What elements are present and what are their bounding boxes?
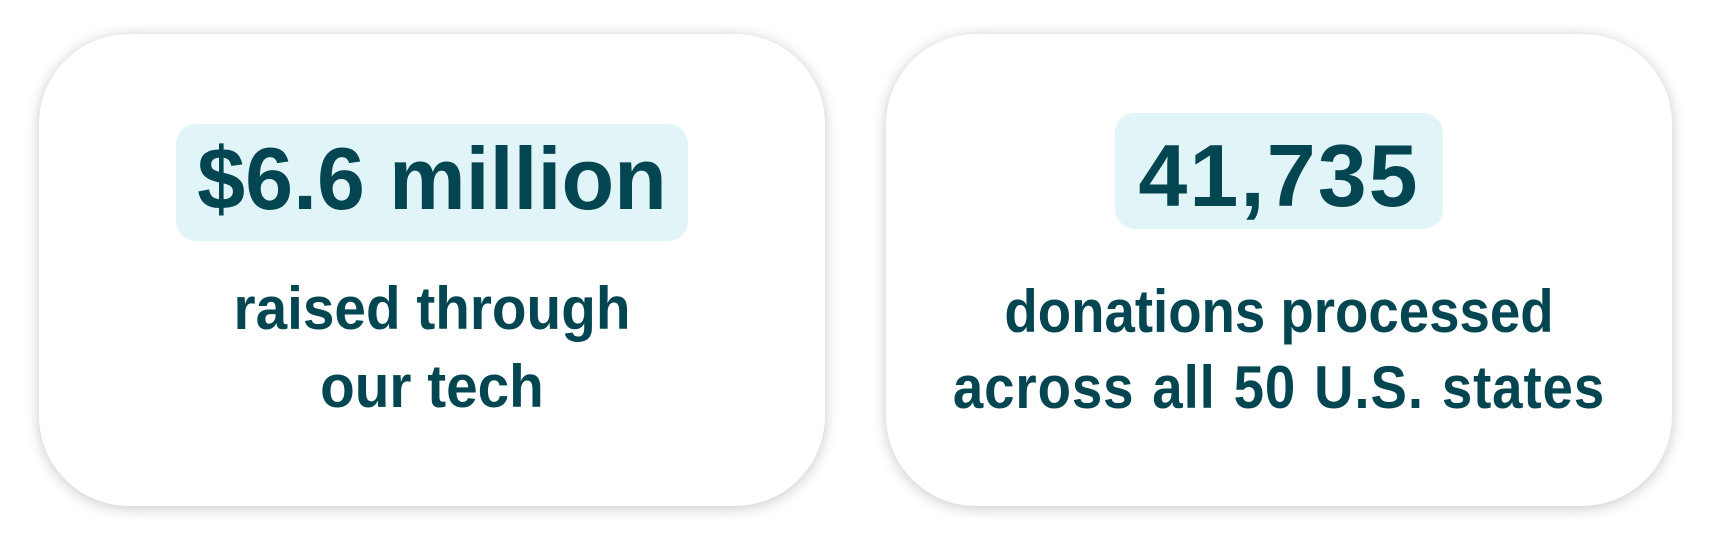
text: donations processed across all 50 U.S. states: across all 50 U.S. states bbox=[953, 354, 1605, 421]
text: donations processed across all 50 U.S. states: donations processed bbox=[1004, 278, 1554, 345]
text: donations processed across all 50 U.S. states bbox=[953, 278, 1605, 421]
panel: donations processed bbox=[886, 34, 1672, 506]
stat: $6.6 million: $6.6 million bbox=[197, 129, 667, 228]
text: raised through our tech: raised through bbox=[234, 275, 630, 342]
stat: 41,735: 41,735 bbox=[1138, 126, 1420, 225]
highlight: 41,735 bbox=[1115, 113, 1443, 229]
panel: funds raised bbox=[39, 34, 825, 506]
text: raised through our tech bbox=[234, 275, 630, 420]
text: raised through our tech: our tech bbox=[320, 353, 544, 420]
highlight: $6.6 million bbox=[176, 124, 688, 241]
